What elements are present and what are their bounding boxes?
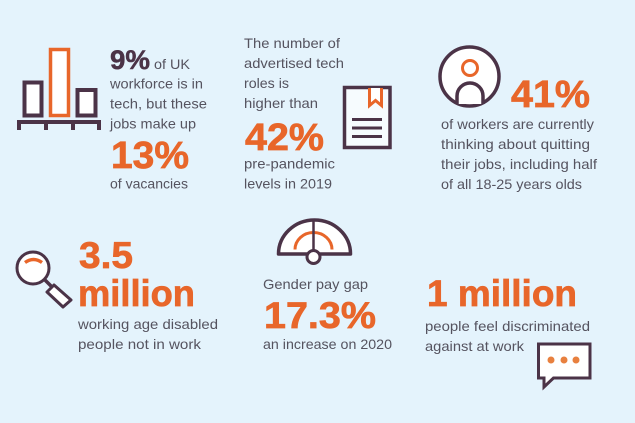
stat: 3.5 million disabled people not in work bbox=[77, 235, 218, 352]
stat: 9% of UK workforce, 13% of vacancies: tech, but these bbox=[110, 96, 207, 112]
icon: book with bookmark bbox=[344, 88, 390, 148]
stat: 3.5 million disabled people not in work: working age disabled bbox=[77, 316, 218, 332]
stat: 9% of UK workforce, 13% of vacancies: jobs make up bbox=[109, 116, 196, 132]
stat: 3.5 million disabled people not in work: million bbox=[78, 273, 195, 314]
stat: advertised tech roles 42% higher: pre-pandemic bbox=[244, 156, 335, 172]
stat: 9% of UK workforce, 13% of vacancies: 13% bbox=[111, 135, 189, 177]
stat: 3.5 million disabled people not in work: people not in work bbox=[78, 336, 202, 352]
stat: advertised tech roles 42% higher: 42% bbox=[245, 117, 324, 159]
stat: 41% of workers thinking about quitting: of all 18-25 years olds bbox=[441, 176, 582, 192]
icon: bar chart bbox=[17, 50, 101, 130]
stat: 1 million feel discriminated against: against at work bbox=[425, 338, 525, 354]
stat: advertised tech roles 42% higher: higher than bbox=[244, 95, 318, 111]
stat: 9% of UK workforce, 13% of vacancies: workforce is in bbox=[109, 76, 203, 92]
stat: 9% of UK workforce, 13% of vacancies: of UK bbox=[154, 56, 191, 72]
stat: advertised tech roles 42% higher: The number of bbox=[244, 35, 340, 51]
icon: gauge bbox=[278, 220, 350, 264]
icon: speech bubble bbox=[538, 344, 590, 387]
stat: 41% of workers thinking about quitting: of workers are currently bbox=[441, 116, 594, 132]
stat: 41% of workers thinking about quitting: thinking about quitting bbox=[441, 136, 590, 152]
stat: 1 million feel discriminated against bbox=[425, 273, 590, 354]
stat: 9% of UK workforce, 13% of vacancies: of vacancies bbox=[110, 176, 188, 192]
stat: 9% of UK workforce, 13% of vacancies: 9% bbox=[110, 45, 150, 75]
stat: gender pay gap 17.3%: an increase on 2020 bbox=[263, 336, 392, 352]
stat: 9% of UK workforce, 13% of vacancies bbox=[109, 45, 207, 192]
stat: 1 million feel discriminated against: 1 million bbox=[427, 273, 577, 314]
stat: gender pay gap 17.3%: 17.3% bbox=[264, 295, 376, 336]
stat: advertised tech roles 42% higher: roles is bbox=[244, 75, 289, 91]
stat: 1 million feel discriminated against: people feel discriminated bbox=[425, 318, 590, 334]
icon: person in circle bbox=[440, 47, 499, 106]
stat: 41% of workers thinking about quitting bbox=[441, 74, 597, 192]
stat: advertised tech roles 42% higher: advertised tech bbox=[244, 55, 344, 71]
stat: advertised tech roles 42% higher: levels in 2019 bbox=[244, 176, 332, 192]
stat: 3.5 million disabled people not in work: 3.5 bbox=[79, 235, 133, 276]
stat: gender pay gap 17.3% bbox=[263, 276, 392, 352]
stat: gender pay gap 17.3%: Gender pay gap bbox=[263, 276, 368, 292]
stat: 41% of workers thinking about quitting: 41% bbox=[511, 74, 590, 116]
stat: 41% of workers thinking about quitting: their jobs, including half bbox=[441, 156, 597, 172]
icon: magnifying glass bbox=[17, 252, 71, 307]
stat: advertised tech roles 42% higher bbox=[244, 35, 344, 192]
